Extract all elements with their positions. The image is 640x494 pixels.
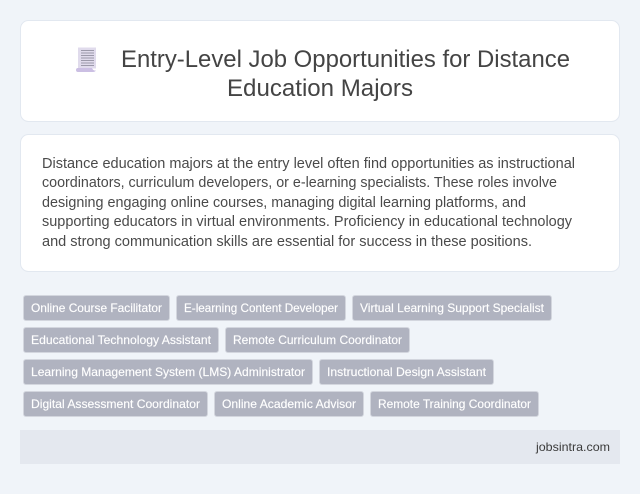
- tag: [214, 392, 364, 416]
- panel: header: [20, 20, 620, 122]
- tag: [24, 360, 312, 384]
- tag: [226, 328, 410, 352]
- tag: Remote Training Coordinator: [378, 397, 531, 411]
- tag: Virtual Learning Support Specialist: [360, 301, 545, 315]
- tag: [320, 360, 494, 384]
- tag: Learning Management System (LMS) Administrator: [31, 365, 305, 379]
- tag: Online Academic Advisor: [222, 397, 356, 411]
- text block: description: designing engaging online courses, managing digital learning platforms, and: [42, 195, 526, 211]
- tag: Remote Curriculum Coordinator: [233, 333, 402, 347]
- tags: job titles: [24, 296, 552, 416]
- tag: Educational Technology Assistant: [31, 333, 212, 347]
- footer: [20, 430, 620, 464]
- tag: [24, 392, 208, 416]
- tag: [24, 296, 170, 320]
- icon: paper scroll: [76, 48, 96, 72]
- title: Education Majors: [227, 75, 413, 102]
- text block: description: coordinators, curriculum developers, or e-learning specialists. These roles involve: [42, 175, 557, 191]
- tag: [176, 296, 346, 320]
- title: [121, 46, 570, 102]
- panel: description: [20, 134, 620, 272]
- tag: [24, 328, 218, 352]
- text block: description: Distance education majors at the entry level often find opportunities as instructional: [42, 156, 575, 172]
- title: Entry-Level Job Opportunities for Distance: [121, 46, 570, 73]
- tag: [370, 392, 538, 416]
- tag: Online Course Facilitator: [31, 301, 162, 315]
- tag: Digital Assessment Coordinator: [31, 397, 200, 411]
- tag: E-learning Content Developer: [184, 301, 338, 315]
- text block: description: and strong communication skills are essential for success in these positions.: [42, 234, 532, 250]
- footer source text: jobsintra.com: [535, 440, 610, 454]
- tag: Instructional Design Assistant: [327, 365, 487, 379]
- text block: description: supporting educators in virtual environments. Proficiency in educational technology: [42, 214, 573, 230]
- text block: description: [42, 156, 575, 250]
- tag: [352, 296, 552, 320]
